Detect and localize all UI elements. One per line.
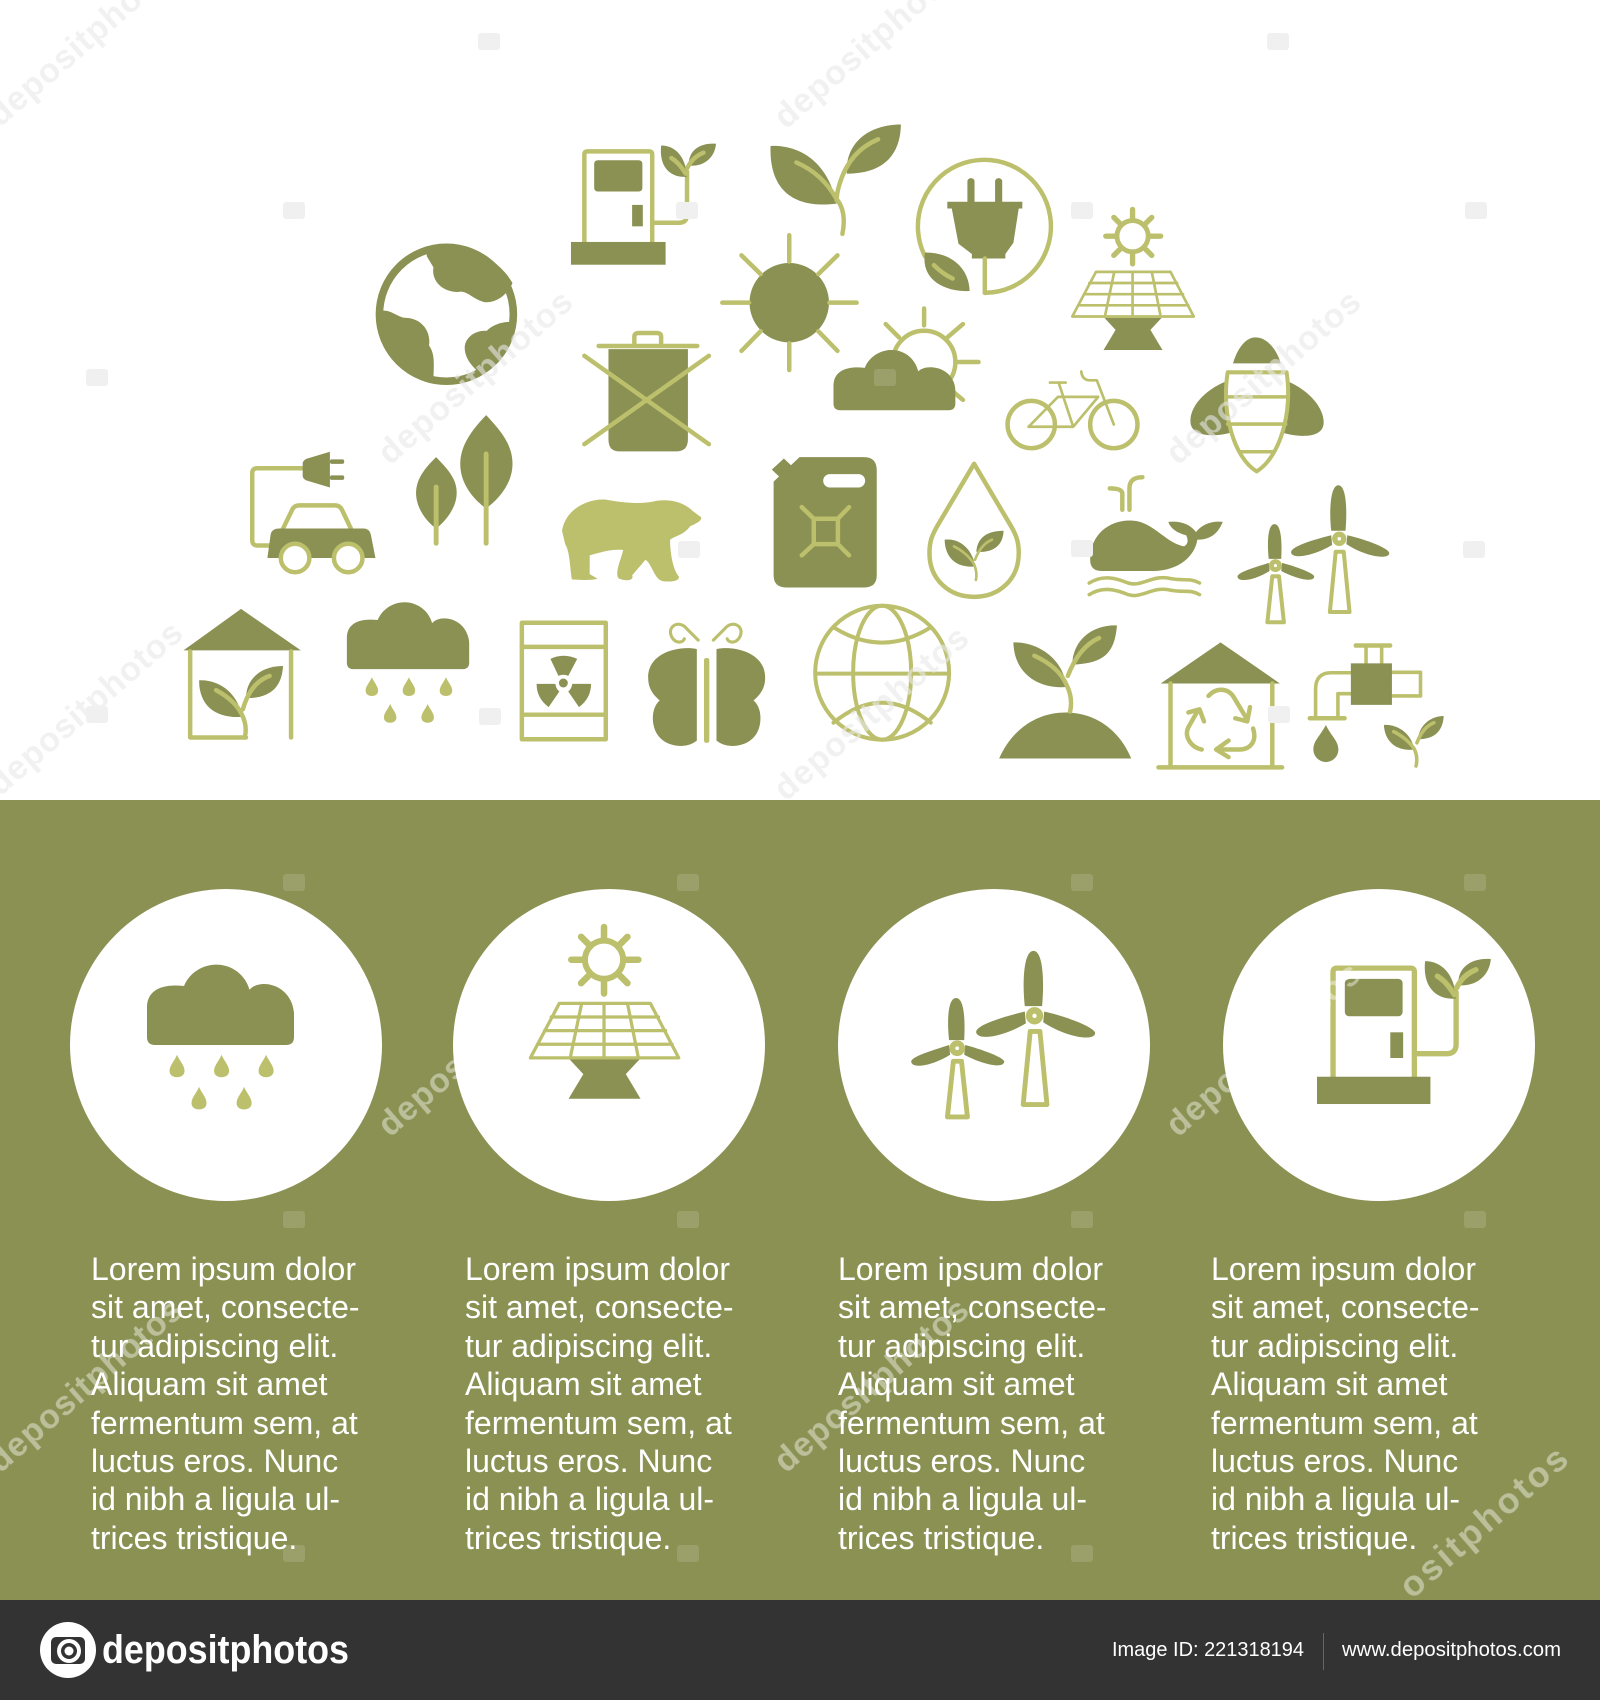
icon: rain cloud — [347, 602, 469, 723]
text block 2: trices tristique. — [465, 1520, 671, 1556]
watermarks: upper area: depositphotos — [370, 283, 580, 472]
icon: sun — [722, 235, 857, 370]
icon: wind turbines in circle 3 — [911, 951, 1095, 1117]
text block 1: id nibh a ligula ul- — [91, 1481, 340, 1517]
icon: fuel pump in circle 4 — [1317, 959, 1491, 1104]
footer bar — [0, 1600, 1600, 1700]
icon: trees — [416, 415, 512, 543]
icon: rain cloud in circle 1 — [147, 965, 294, 1109]
text block 1 — [91, 1251, 360, 1556]
circle panel: wind — [838, 888, 1150, 1200]
icon: water tap with sprout — [1310, 646, 1444, 766]
footer logo: depositphotos — [102, 1628, 349, 1672]
icon: plug in circle — [918, 160, 1051, 293]
text block 3: Lorem ipsum dolor — [838, 1251, 1103, 1287]
text block 4: trices tristique. — [1211, 1520, 1417, 1556]
watermarks: lower area: ositphotos — [1390, 1437, 1576, 1606]
text block 4: Lorem ipsum dolor — [1211, 1251, 1476, 1287]
text block 2: fermentum sem, at — [465, 1405, 732, 1441]
text block 1: sit amet, consecte- — [91, 1289, 360, 1325]
text block 3: sit amet, consecte- — [838, 1289, 1107, 1325]
footer website: www.depositphotos.com — [1341, 1639, 1561, 1661]
icon: house with recycling arrows — [1158, 642, 1282, 767]
text block 4: id nibh a ligula ul- — [1211, 1481, 1460, 1517]
watermarks: upper area: depositphotos — [1158, 283, 1368, 472]
icon: water drop with sprout — [929, 464, 1019, 597]
text block 2: sit amet, consecte- — [465, 1289, 734, 1325]
text block 3: luctus eros. Nunc — [838, 1443, 1085, 1479]
circle panel: green fuel — [1223, 888, 1535, 1200]
icon: wire globe — [815, 606, 949, 740]
icon: whale — [1089, 477, 1223, 596]
icon: crossed trash can — [584, 333, 709, 451]
text block 3: fermentum sem, at — [838, 1405, 1105, 1441]
text block 1: fermentum sem, at — [91, 1405, 358, 1441]
green lower panel — [0, 800, 1600, 1600]
icon: solar panel in circle 2 — [530, 927, 679, 1099]
icon: earth — [379, 247, 513, 381]
watermarks: lower area: depositphotos — [1158, 955, 1368, 1144]
text block 2: tur adipiscing elit. — [465, 1328, 712, 1364]
icon: wind turbines — [1237, 485, 1389, 622]
watermarks: upper area — [0, 0, 1368, 808]
text block 3: Aliquam sit amet — [838, 1366, 1075, 1402]
watermarks: lower area: depositphotos — [766, 1291, 976, 1480]
footer image id: Image ID: 221318194 — [1112, 1639, 1304, 1661]
watermark camera marks — [86, 33, 1487, 1562]
text block 1: trices tristique. — [91, 1520, 297, 1556]
icon: polar bear — [562, 499, 701, 582]
text block 2: Lorem ipsum dolor — [465, 1251, 730, 1287]
text block 1: Aliquam sit amet — [91, 1366, 328, 1402]
text block 2: luctus eros. Nunc — [465, 1443, 712, 1479]
circle panel: rain — [70, 888, 382, 1200]
text block 1: Lorem ipsum dolor — [91, 1251, 356, 1287]
text block 4: luctus eros. Nunc — [1211, 1443, 1458, 1479]
text block 4: sit amet, consecte- — [1211, 1289, 1480, 1325]
text block 3: id nibh a ligula ul- — [838, 1481, 1087, 1517]
text block 3: trices tristique. — [838, 1520, 1044, 1556]
text block 4: fermentum sem, at — [1211, 1405, 1478, 1441]
text block 4 — [1211, 1251, 1480, 1556]
icon: radioactive barrel — [522, 623, 606, 739]
icon: bicycle — [1008, 371, 1137, 448]
text block 4: tur adipiscing elit. — [1211, 1328, 1458, 1364]
text block 2: Aliquam sit amet — [465, 1366, 702, 1402]
icon: butterfly — [648, 624, 765, 746]
text block 2 — [465, 1251, 734, 1556]
icon: electric car — [252, 452, 375, 572]
text block 1: tur adipiscing elit. — [91, 1328, 338, 1364]
icon: sprout on mound — [999, 625, 1131, 758]
circle panel: solar — [453, 888, 765, 1200]
watermarks: lower area: depositphotos — [370, 955, 580, 1144]
text block 3: tur adipiscing elit. — [838, 1328, 1085, 1364]
text block 4: Aliquam sit amet — [1211, 1366, 1448, 1402]
icon: sun behind cloud — [833, 308, 979, 410]
icon: jerry can — [772, 457, 877, 587]
text block 1: luctus eros. Nunc — [91, 1443, 338, 1479]
icon: fuel pump with sprout — [571, 144, 716, 265]
text block 3 — [838, 1251, 1107, 1556]
icon: solar panel — [1072, 209, 1194, 350]
footer logo — [40, 1622, 349, 1678]
watermarks: upper area: depositphotos — [766, 619, 976, 808]
icon: house with sprout — [183, 609, 301, 737]
text block 2: id nibh a ligula ul- — [465, 1481, 714, 1517]
icon: large sprout — [770, 125, 901, 234]
watermarks: lower area — [0, 955, 1576, 1606]
icon: bee — [1190, 337, 1324, 471]
